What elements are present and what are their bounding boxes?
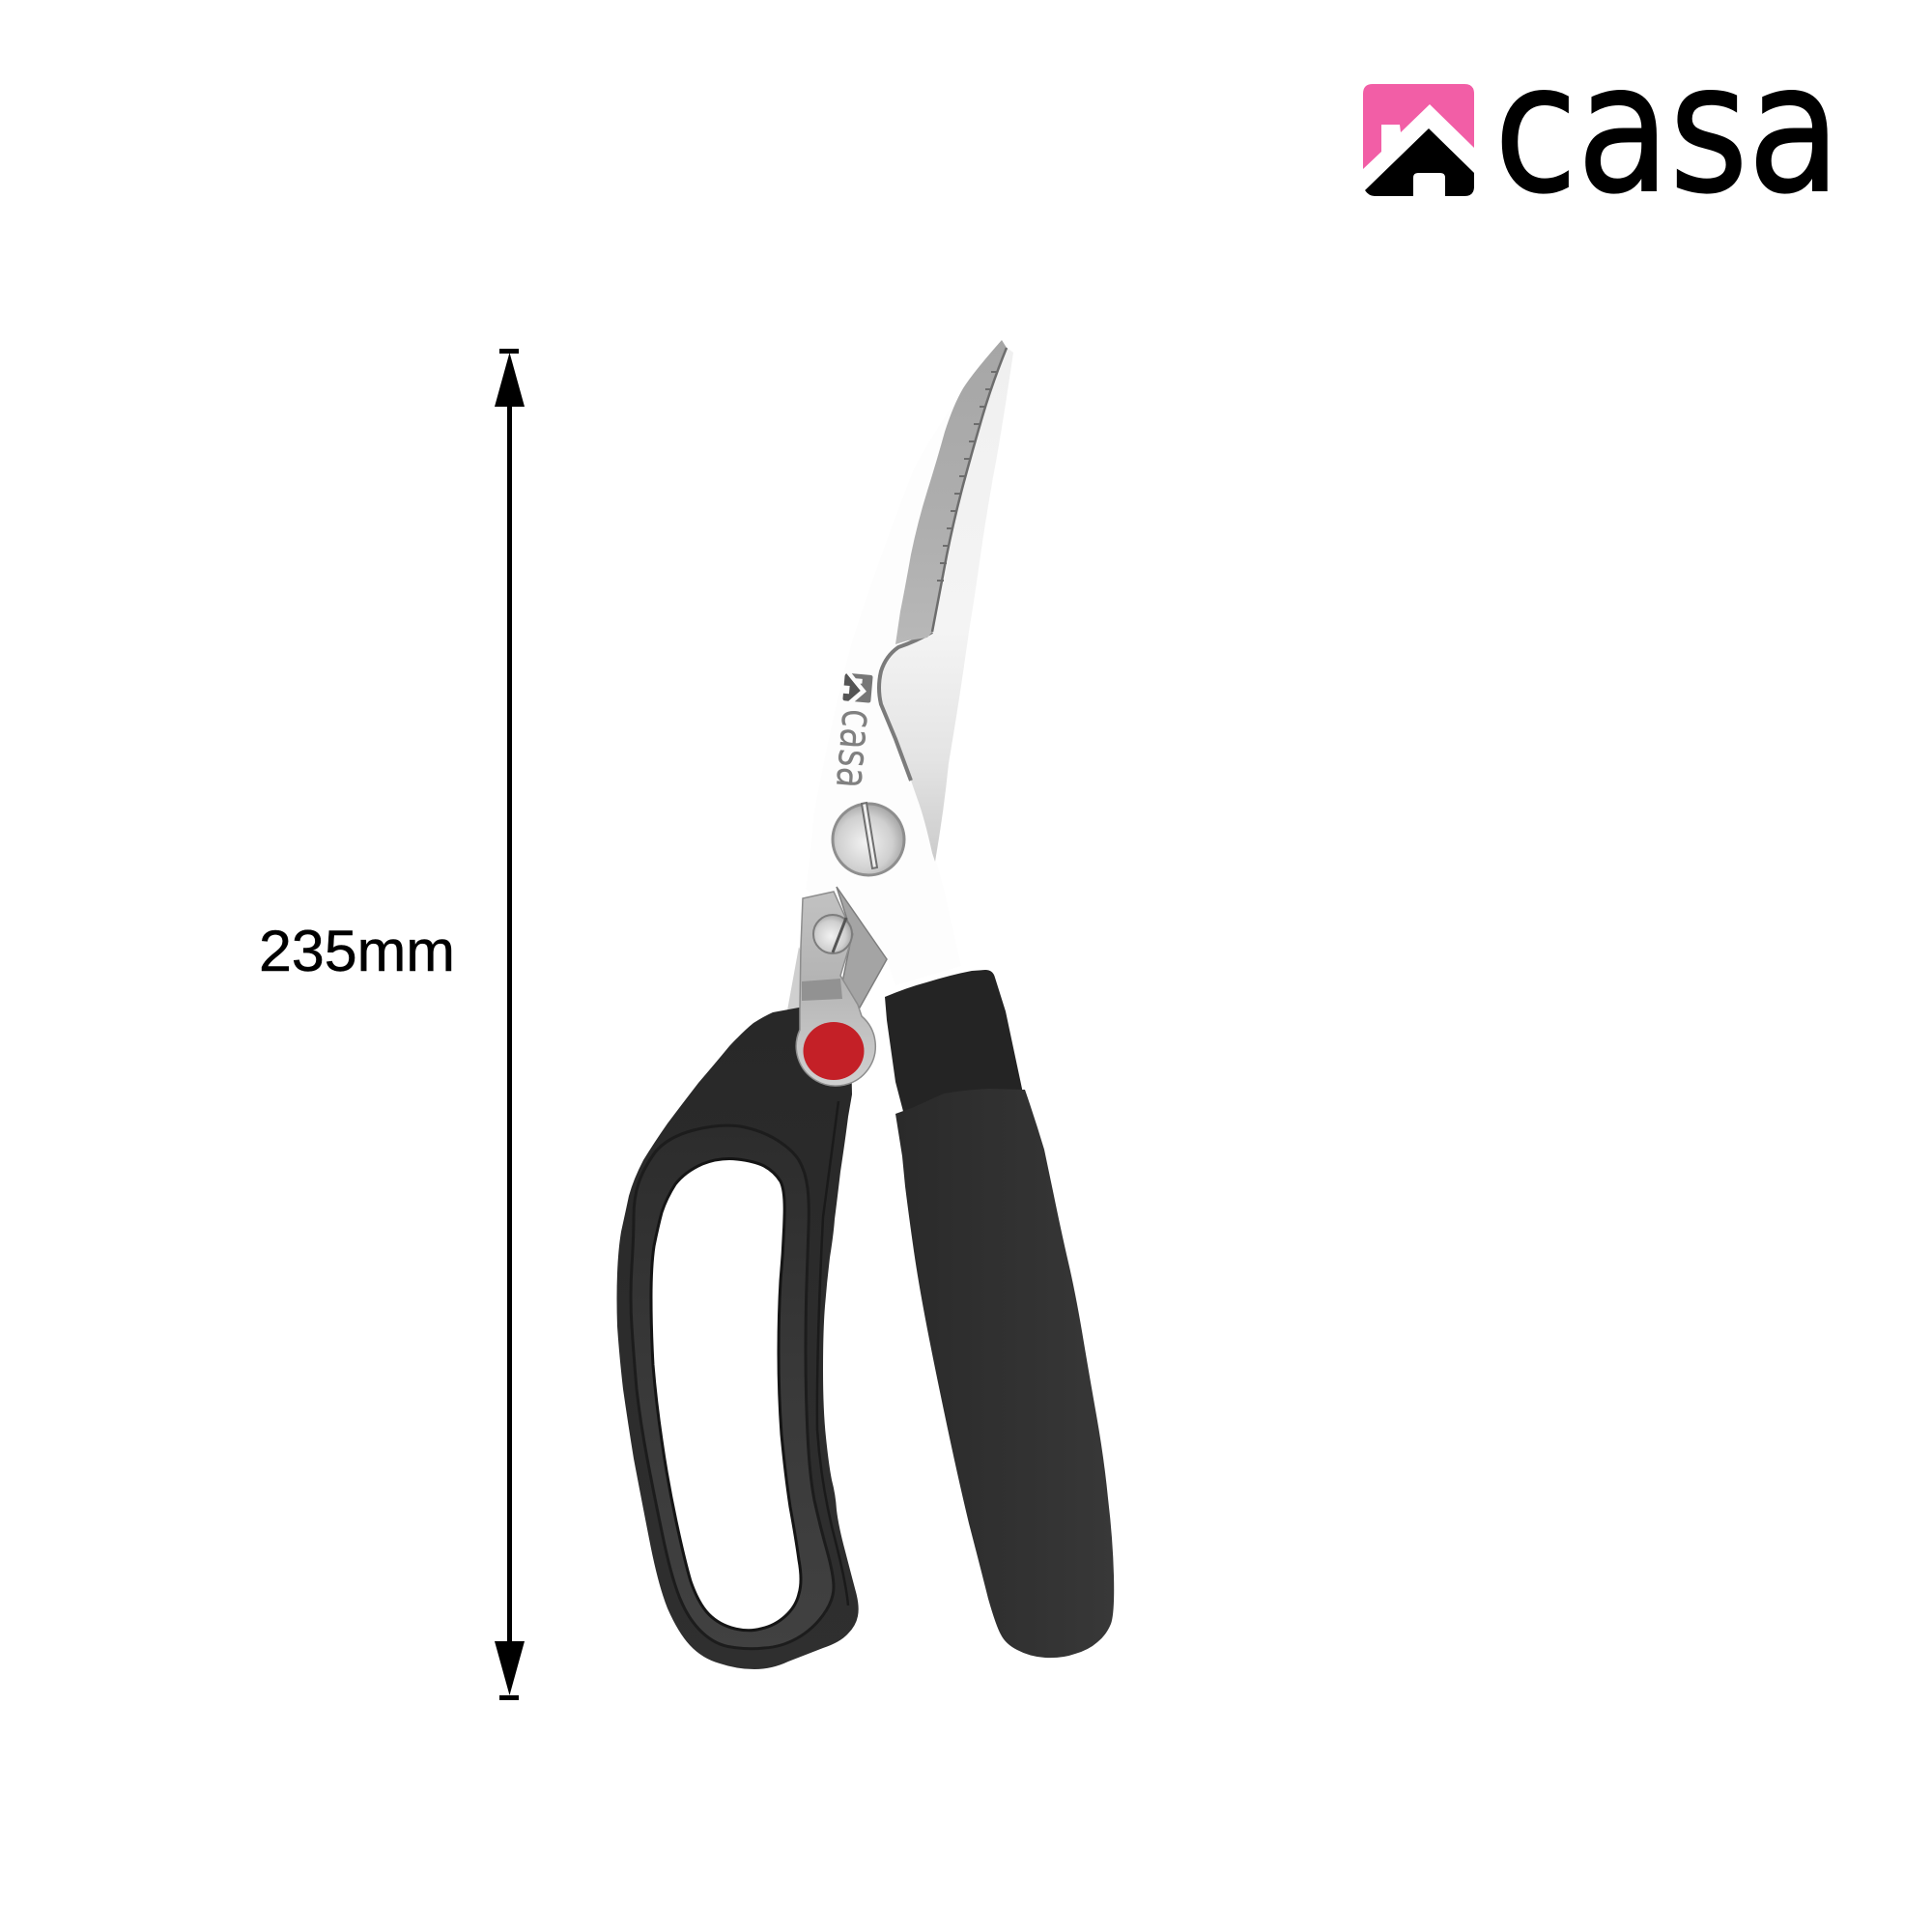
logo: casa <box>1363 26 1840 233</box>
icon: black house <box>1365 128 1474 196</box>
handle raised inner band <box>631 1125 834 1649</box>
white upper blade body <box>806 340 1013 985</box>
blade logo text: casa <box>826 707 885 790</box>
handle outer shell <box>616 1005 859 1669</box>
scissors <box>616 340 1114 1669</box>
tang sliver behind the latch <box>787 947 803 1010</box>
small latch screw <box>813 915 852 953</box>
latch back plate <box>837 887 887 1008</box>
right grip <box>895 1089 1114 1658</box>
red lock button <box>804 1022 864 1080</box>
serrated edge line <box>932 348 1007 632</box>
blade logo icon <box>842 673 873 703</box>
grip collar, textured <box>885 970 1022 1122</box>
dimension label: 235mm <box>259 919 455 983</box>
pivot screw <box>833 803 904 875</box>
logo wordmark: casa <box>1494 26 1840 233</box>
dimension arrow: height <box>495 349 525 1700</box>
serrated grey blade bevel <box>895 340 1007 644</box>
latch front plate with ring <box>796 892 875 1086</box>
notch outline on blade <box>879 632 932 781</box>
handle finger hole <box>651 1159 801 1631</box>
icon: pink roof square <box>1363 84 1474 169</box>
lower blade, light body <box>879 348 1013 862</box>
left handle <box>616 1005 859 1669</box>
handle side seam <box>817 1101 848 1605</box>
